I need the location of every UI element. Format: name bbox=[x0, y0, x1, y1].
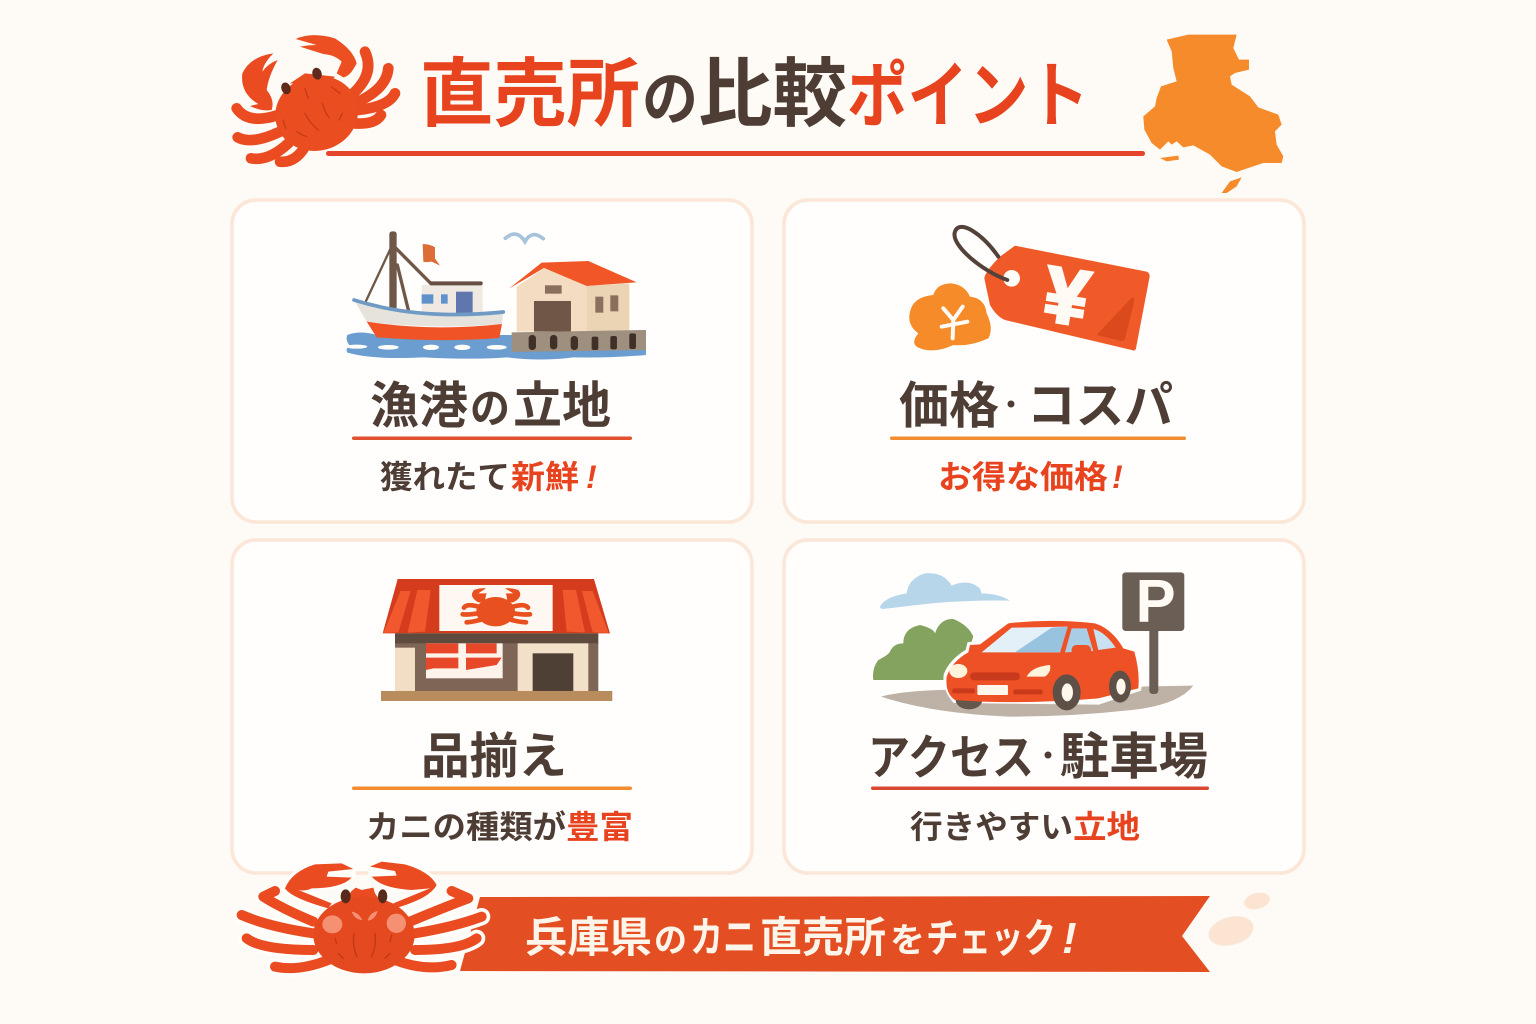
underline bbox=[871, 786, 1209, 790]
underline bbox=[352, 786, 632, 790]
heading: price bbox=[899, 378, 1173, 434]
left claw bbox=[242, 53, 278, 110]
icon: title crab bbox=[237, 35, 395, 162]
heading: fishing port bbox=[370, 378, 611, 434]
underline bbox=[890, 436, 1186, 440]
heading: selection: 品揃え bbox=[421, 730, 567, 784]
subtext accent: fresh: 新鮮 bbox=[511, 459, 579, 495]
heading: price: 価格 bbox=[899, 378, 999, 434]
subtext: access: 行きやすい bbox=[910, 809, 1073, 845]
panel: selection bbox=[232, 540, 752, 873]
banner text: ! bbox=[1062, 914, 1077, 963]
title bbox=[420, 52, 1089, 137]
heading: access: アクセス bbox=[868, 732, 1034, 785]
icon: price tag: ¥ bbox=[1038, 249, 1095, 343]
banner text: の bbox=[654, 922, 687, 960]
banner bbox=[460, 896, 1210, 972]
title: 比較 bbox=[698, 52, 847, 136]
subtext: price: お得な価格 bbox=[938, 459, 1108, 495]
banner text: 兵庫県 bbox=[525, 914, 652, 961]
title: ポイント bbox=[847, 57, 1089, 137]
subtext: variety: カニの種類が bbox=[366, 809, 566, 845]
banner text: カニ bbox=[690, 914, 756, 961]
subtext accent: access: 立地 bbox=[1073, 809, 1140, 845]
underline bbox=[352, 436, 632, 440]
banner text: を bbox=[890, 922, 925, 960]
banner text: 直売所 bbox=[760, 914, 886, 961]
icon: Hyogo map bbox=[1143, 35, 1283, 193]
icon: bottom crab bbox=[242, 862, 482, 973]
icon: boat and warehouse bbox=[346, 231, 646, 359]
heading: price: コスパ bbox=[1027, 378, 1173, 434]
right claw bbox=[296, 35, 357, 77]
title: 直売所 bbox=[420, 52, 640, 136]
panel: price bbox=[784, 200, 1304, 522]
icon: car and parking bbox=[873, 568, 1193, 717]
icon: price tag bbox=[909, 227, 1150, 351]
title underline bbox=[326, 151, 1145, 156]
decorative bubbles bbox=[1205, 890, 1272, 950]
heading: fishing port: の bbox=[470, 385, 510, 432]
banner text: チェック bbox=[926, 917, 1056, 961]
panel: fishing port bbox=[232, 200, 752, 522]
subtext: price: ! bbox=[1112, 459, 1123, 495]
heading: fishing port: 漁港 bbox=[370, 378, 468, 434]
icon: crab shop bbox=[381, 579, 612, 701]
heading: access bbox=[868, 729, 1208, 785]
icon: car and parking: P bbox=[1136, 568, 1176, 635]
subtext: fresh: 獲れたて bbox=[380, 459, 510, 495]
subtext accent: variety: 豊富 bbox=[566, 809, 633, 845]
banner text bbox=[525, 914, 1077, 963]
heading: fishing port: 立地 bbox=[513, 378, 611, 434]
subtext accent: fresh: ! bbox=[586, 459, 597, 495]
heading: access: 駐車場 bbox=[1060, 729, 1208, 785]
panel: access bbox=[784, 540, 1304, 873]
title: の bbox=[642, 66, 698, 133]
